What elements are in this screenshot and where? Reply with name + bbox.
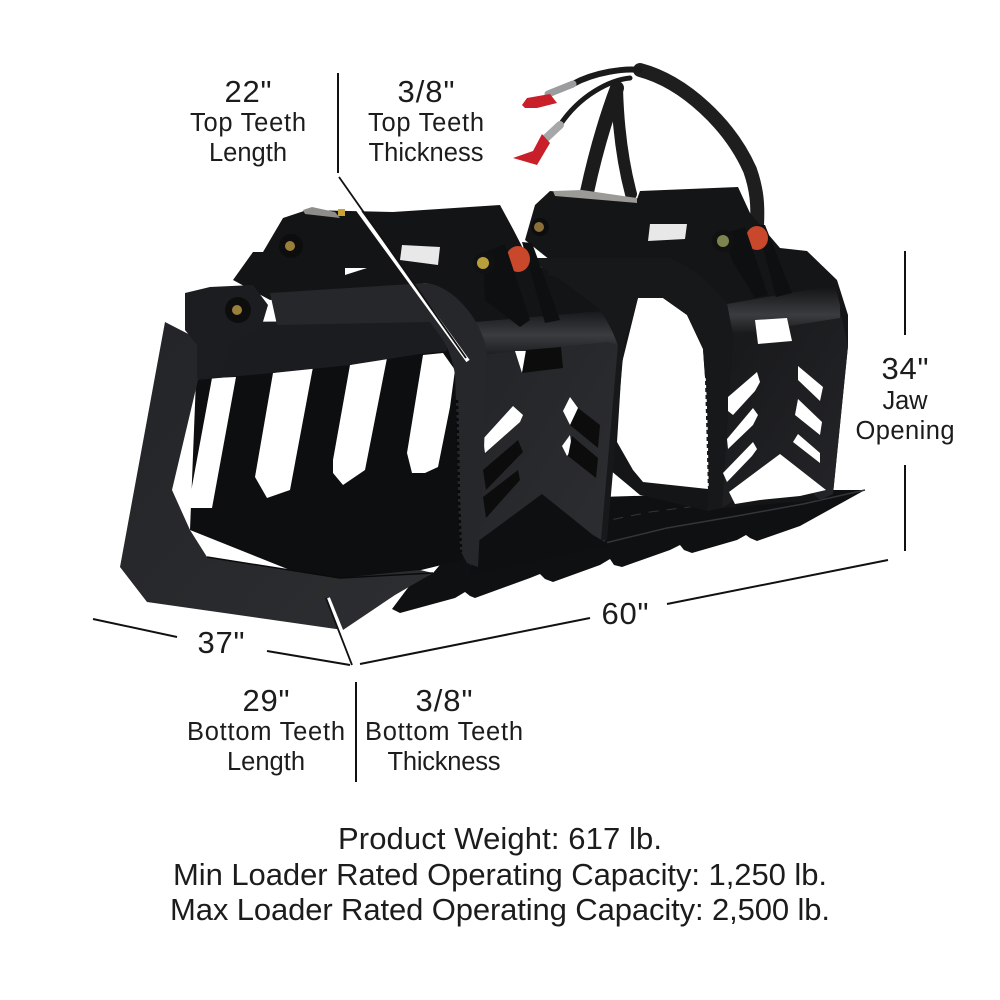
serrated edge <box>457 400 461 552</box>
dimension lines: 34 inch <box>904 251 906 551</box>
label: jaw opening: Jaw <box>882 387 928 415</box>
front curved rim <box>548 272 621 540</box>
hydraulic hoses <box>513 70 757 225</box>
label: bottom teeth thickness: Thickness <box>388 748 500 776</box>
label: depth 37 inch: 37" <box>198 625 244 660</box>
rear mount plate tab <box>553 190 637 203</box>
rear side panel <box>722 310 848 508</box>
front grapple section <box>120 205 623 630</box>
front side panel <box>470 320 623 567</box>
front orange cylinder <box>506 246 530 272</box>
label: width 60 inch: 60" <box>602 596 648 631</box>
label: top teeth thickness: Thickness <box>368 139 484 167</box>
rear hood band <box>727 285 840 335</box>
label: top teeth thickness: 3/8" <box>398 74 454 109</box>
grille windows <box>188 353 455 508</box>
leader: bottom teeth <box>326 598 352 665</box>
front rear plates <box>233 205 603 335</box>
product illustration: grapple bucket <box>120 70 865 630</box>
label: top teeth length <box>190 74 306 167</box>
label: bottom teeth length <box>187 683 345 776</box>
upper slot <box>345 268 367 275</box>
cross brace <box>197 320 447 380</box>
red quick coupler, top <box>522 94 557 108</box>
specifications text block <box>170 821 830 927</box>
front panel cut-outs <box>483 347 600 518</box>
label: top teeth thickness: Top Teeth <box>368 109 484 137</box>
label: top teeth length: 22" <box>224 74 272 109</box>
upper hinge nut <box>279 234 303 258</box>
dimension lines: 60 inch <box>360 560 888 664</box>
red quick coupler, bottom <box>513 134 550 165</box>
dimension lines: 37 inch <box>93 619 350 665</box>
front arch frame <box>190 283 487 567</box>
label: jaw opening: 34" <box>882 351 928 386</box>
label: bottom teeth thickness: 3/8" <box>416 683 472 718</box>
specifications text block: Max Loader Rated Operating Capacity: 2,500 lb. <box>170 892 830 927</box>
hinge plate <box>185 285 268 378</box>
rear spec label <box>648 224 687 241</box>
specifications text block: Product Weight: 617 lb. <box>338 821 662 856</box>
label: bottom teeth length: 29" <box>242 683 290 718</box>
label: top teeth length: Top Teeth <box>190 109 306 137</box>
rear orange cylinder <box>746 226 768 250</box>
front hinge nut <box>225 297 251 323</box>
divider: bottom teeth <box>355 682 357 782</box>
bottom teeth <box>392 490 865 613</box>
front hood band <box>475 311 620 355</box>
rear pin nut <box>712 230 734 252</box>
label: jaw opening: Opening <box>856 417 954 445</box>
rear bracket front plate <box>722 227 768 298</box>
rear hinge nut <box>531 218 549 236</box>
top mount tab <box>303 207 340 218</box>
rear grapple section <box>525 187 848 511</box>
label: bottom teeth thickness: Bottom Teeth <box>365 718 523 746</box>
inner floor steps <box>207 557 433 578</box>
rear arch band <box>530 258 733 511</box>
rear serrations <box>705 378 708 489</box>
front spec label <box>400 245 440 265</box>
label: jaw opening <box>856 351 954 445</box>
front interior <box>190 320 470 590</box>
divider: top teeth <box>337 73 339 173</box>
backing behind side panel <box>470 470 610 575</box>
label: bottom teeth length: Bottom Teeth <box>187 718 345 746</box>
front bucket plate <box>120 322 433 630</box>
label: bottom teeth length: Length <box>227 748 305 776</box>
label: top teeth length: Length <box>209 139 287 167</box>
rear bracket back plate <box>757 225 792 297</box>
label: top teeth thickness <box>368 74 484 167</box>
leader: top teeth length to tooth <box>339 177 468 361</box>
rear panel cut-outs <box>723 318 826 504</box>
front bracket back plate <box>522 242 560 323</box>
front bracket front plate <box>483 244 530 327</box>
label: bottom teeth thickness <box>365 683 523 776</box>
specifications text block: Min Loader Rated Operating Capacity: 1,250 lb. <box>173 857 827 892</box>
front pin nut <box>473 252 495 274</box>
